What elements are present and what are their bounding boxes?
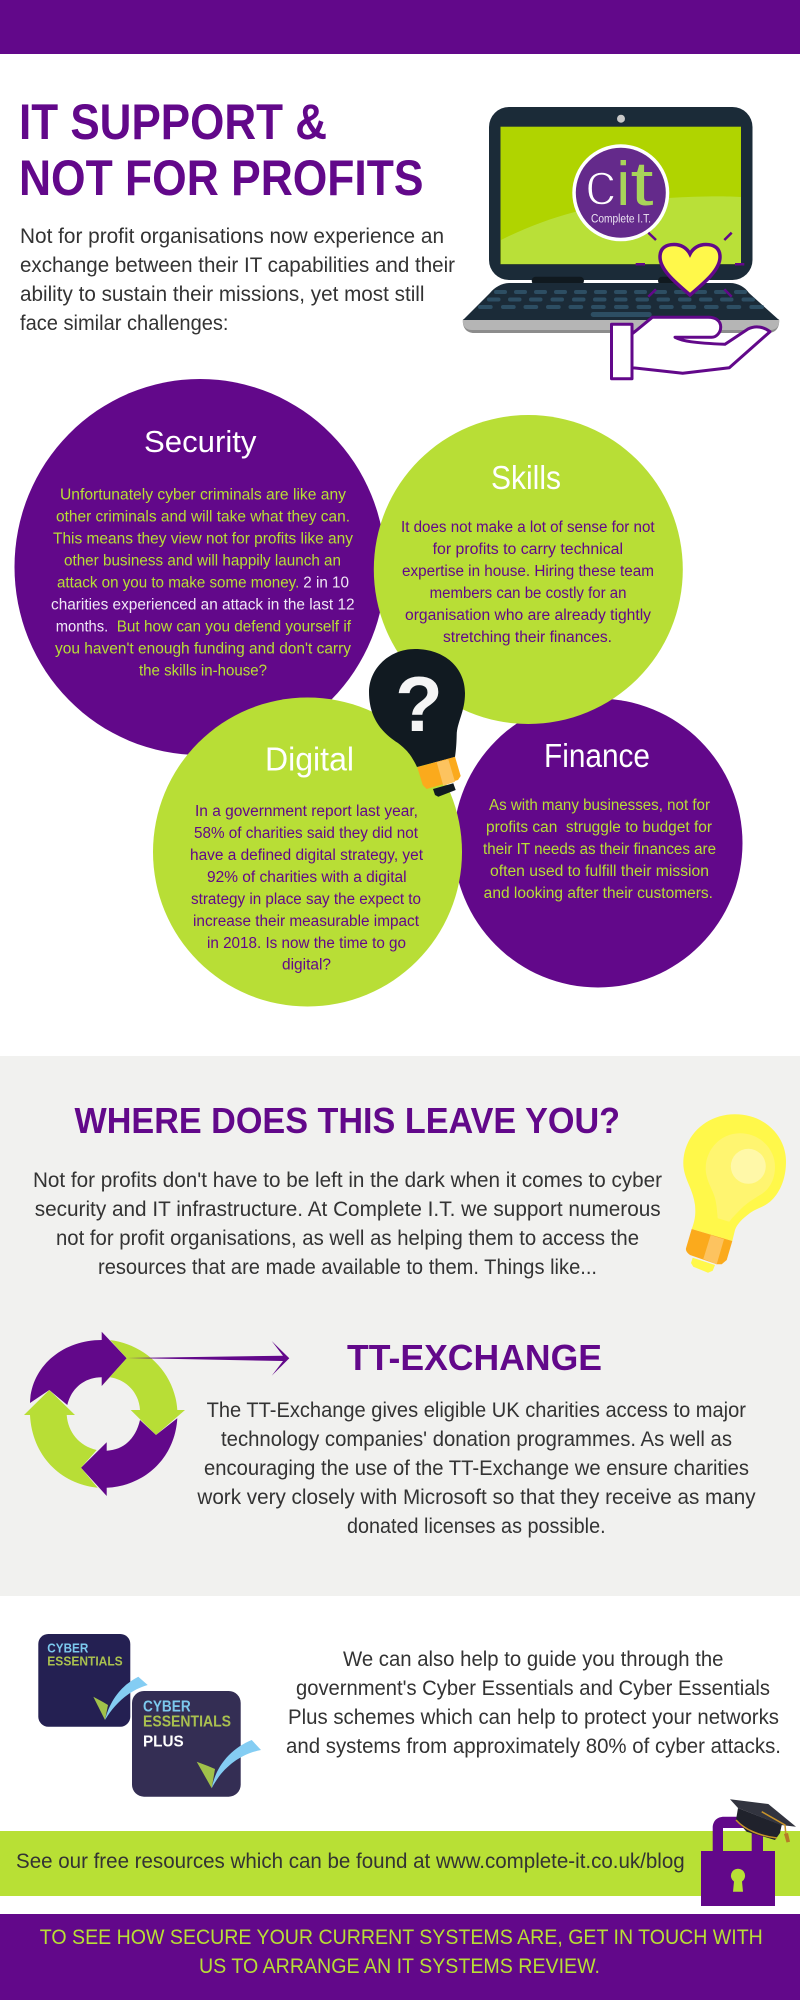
panel: where does this leave you xyxy=(0,1056,800,1596)
laptop hinges xyxy=(532,277,698,285)
where does this leave you text: Not for profits don't have to be left in the dark when it comes to cyber xyxy=(33,1168,662,1192)
keyboard keys xyxy=(478,290,764,317)
cyber essentials text: Plus schemes which can help to protect your networks xyxy=(288,1705,779,1729)
digital body text: strategy in place say the expect to xyxy=(191,891,421,908)
cyber essentials text: and systems from approximately 80% of cyber attacks. xyxy=(286,1734,781,1758)
intro text xyxy=(20,224,455,335)
security body text: But how can you defend yourself if xyxy=(117,618,352,635)
finance body text: As with many businesses, not for xyxy=(489,797,710,814)
footer banner xyxy=(0,1914,800,2000)
badge: cyber essentials: CYBER xyxy=(47,1641,89,1656)
logo badge xyxy=(572,144,669,241)
digital body text: 92% of charities with a digital xyxy=(207,869,407,886)
icon: yellow lightbulb xyxy=(683,1114,786,1273)
panel: digital: Digital xyxy=(265,741,354,778)
icon: padlock with graduation cap xyxy=(701,1799,796,1906)
laptop silver base xyxy=(463,319,779,333)
heading: TT-exchange: TT-EXCHANGE xyxy=(347,1337,602,1378)
cyber essentials text: We can also help to guide you through the xyxy=(343,1647,724,1671)
top banner xyxy=(0,0,800,54)
security body text: other criminals and will take what they can. xyxy=(56,508,350,526)
cyber essentials text xyxy=(286,1647,781,1758)
skills body text: organisation who are already tightly xyxy=(405,607,651,624)
digital body text: digital? xyxy=(282,957,331,974)
skills body text: expertise in house. Hiring these team xyxy=(402,563,654,580)
footer call to action xyxy=(40,1925,763,1978)
digital body text: in 2018. Is now the time to go xyxy=(207,935,406,952)
skills body text: It does not make a lot of sense for not xyxy=(401,519,655,536)
icon: question mark lightbulb xyxy=(369,649,465,797)
finance body text: often used to fulfill their mission xyxy=(490,863,709,880)
where does this leave you text: security and IT infrastructure. At Complete I.T. we support numerous xyxy=(35,1197,661,1221)
digital body text: have a defined digital strategy, yet xyxy=(190,847,424,864)
security body text: Unfortunately cyber criminals are like any xyxy=(60,487,346,504)
green arrow bottom left xyxy=(24,1390,98,1488)
digital body text xyxy=(190,803,424,974)
skills body text: members can be costly for an xyxy=(430,585,626,602)
digital body text: increase their measurable impact xyxy=(193,913,420,930)
badge: cyber essentials xyxy=(38,1634,148,1727)
where does this leave you text: not for profit organisations, as well as helping them to access the xyxy=(56,1226,639,1250)
panel: skills xyxy=(374,415,683,724)
digital body text: 58% of charities said they did not xyxy=(194,825,419,842)
purple arrow top left xyxy=(30,1332,127,1405)
arrow: to TT-exchange xyxy=(127,1341,289,1376)
purple arrow bottom right xyxy=(81,1418,177,1496)
laptop screen xyxy=(500,127,741,264)
panel: skills: Skills xyxy=(491,459,561,496)
TT-exchange text: donated licenses as possible. xyxy=(347,1514,606,1538)
security body text: attack on you to make some money. xyxy=(57,575,299,592)
icon: open hand xyxy=(612,317,770,379)
laptop camera xyxy=(617,115,625,123)
logo badge: Complete I.T. xyxy=(591,213,651,225)
intro text: Not for profit organisations now experience an xyxy=(20,224,444,248)
panel: finance: Finance xyxy=(544,737,650,774)
badge: cyber essentials plus: CYBER xyxy=(143,1699,191,1716)
TT-exchange text: technology companies' donation programmes. As well as xyxy=(221,1427,732,1451)
logo badge: i xyxy=(616,150,630,219)
badge: cyber essentials plus: ESSENTIALS xyxy=(143,1714,231,1731)
security body text: 2 in 10 xyxy=(303,575,349,592)
TT-exchange text: The TT-Exchange gives eligible UK charities access to major xyxy=(207,1398,746,1422)
where does this leave you text: resources that are made available to them. Things like... xyxy=(98,1255,597,1279)
icon: laptop with logo, heart and hand xyxy=(463,107,779,379)
logo badge: c xyxy=(584,150,616,219)
icon: heart xyxy=(660,244,720,295)
badge: cyber essentials plus xyxy=(132,1691,261,1797)
badge: cyber essentials plus: PLUS xyxy=(143,1734,184,1751)
heart rays xyxy=(636,233,744,297)
intro text: ability to sustain their missions, yet most still xyxy=(20,282,424,306)
resources bar xyxy=(0,1831,800,1896)
where does this leave you text xyxy=(33,1168,662,1279)
security body text: months. xyxy=(56,618,108,635)
icon: question mark lightbulb: ? xyxy=(395,660,443,748)
security body text xyxy=(51,487,355,680)
resources text: See our free resources which can be found at www.complete-it.co.uk/blog xyxy=(16,1849,685,1873)
finance body text xyxy=(483,797,716,902)
skills body text xyxy=(401,519,655,646)
finance body text: and looking after their customers. xyxy=(484,885,713,902)
panel: digital xyxy=(153,698,462,1006)
green arrow top right xyxy=(102,1340,185,1435)
panel: finance xyxy=(454,698,742,988)
TT-exchange text xyxy=(196,1398,756,1538)
graduation cap xyxy=(730,1799,796,1842)
skills body text: for profits to carry technical xyxy=(433,541,623,558)
icon: circular exchange arrows xyxy=(24,1332,185,1496)
cyber essentials text: government's Cyber Essentials and Cyber Essentials xyxy=(296,1676,770,1700)
panel: security: Security xyxy=(144,424,257,459)
padlock xyxy=(701,1817,775,1906)
title: IT SUPPORT & xyxy=(19,94,327,150)
title xyxy=(19,94,424,206)
panel: security xyxy=(14,379,386,755)
footer call to action: US TO ARRANGE AN IT SYSTEMS REVIEW. xyxy=(199,1954,600,1978)
laptop keyboard deck xyxy=(463,283,779,320)
finance body text: their IT needs as their finances are xyxy=(483,841,716,858)
digital body text: In a government report last year, xyxy=(195,803,418,820)
badge: cyber essentials: ESSENTIALS xyxy=(47,1654,123,1669)
finance body text: profits can struggle to budget for xyxy=(486,819,712,836)
heading: where does this leave you: WHERE DOES THIS LEAVE YOU? xyxy=(74,1100,620,1141)
skills body text: stretching their finances. xyxy=(443,629,612,646)
security body text: other business and will happily launch an xyxy=(64,553,341,570)
intro text: face similar challenges: xyxy=(20,311,228,335)
security body text: the skills in-house? xyxy=(139,663,267,680)
laptop lid xyxy=(489,107,752,280)
intro text: exchange between their IT capabilities and their xyxy=(20,253,455,277)
security body text: charities experienced an attack in the last 12 xyxy=(51,596,355,614)
security body text: This means they view not for profits like any xyxy=(53,530,353,547)
logo badge: t xyxy=(630,150,654,219)
security body text: you haven't enough funding and don't carry xyxy=(55,641,351,658)
title: NOT FOR PROFITS xyxy=(19,150,424,206)
TT-exchange text: encouraging the use of the TT-Exchange we ensure charities xyxy=(204,1456,749,1480)
TT-exchange text: work very closely with Microsoft so that they receive as many xyxy=(196,1485,756,1509)
